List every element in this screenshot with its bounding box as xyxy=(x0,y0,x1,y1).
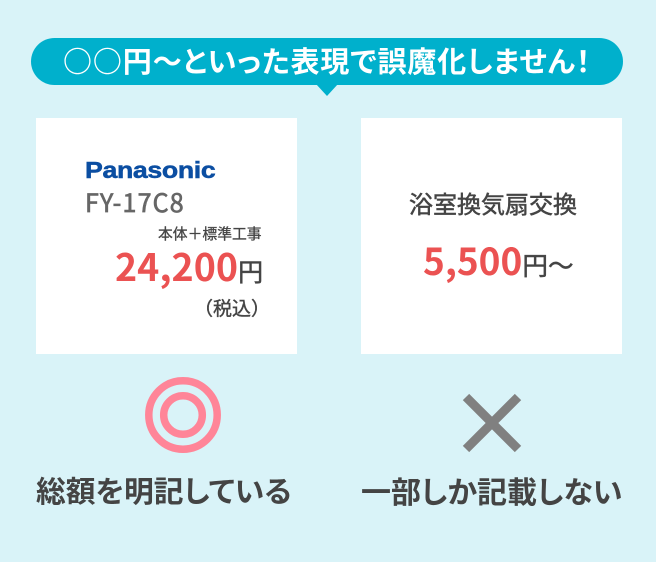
service name: 浴室換気扇交換 xyxy=(409,185,577,220)
caption: bad: 一部しか記載しない xyxy=(361,468,622,512)
tax note: （税込） xyxy=(194,294,270,321)
model name: FY-17C8 xyxy=(85,184,185,220)
icon: cross xyxy=(462,394,522,452)
price note: 本体＋標準工事 xyxy=(158,223,262,244)
panel: bathroom fan replacement xyxy=(361,118,622,354)
speech banner: ○○円〜といった表現で誤魔化しません！ xyxy=(63,39,591,81)
icon: double circle xyxy=(145,377,221,453)
Panasonic logo: Panasonic xyxy=(85,157,215,183)
speech banner xyxy=(31,38,623,96)
price from: 5,500円〜 xyxy=(423,232,574,286)
price: 24,200円 xyxy=(115,237,263,292)
caption: good: 総額を明記している xyxy=(36,467,292,511)
panel: Panasonic total price xyxy=(36,118,297,354)
